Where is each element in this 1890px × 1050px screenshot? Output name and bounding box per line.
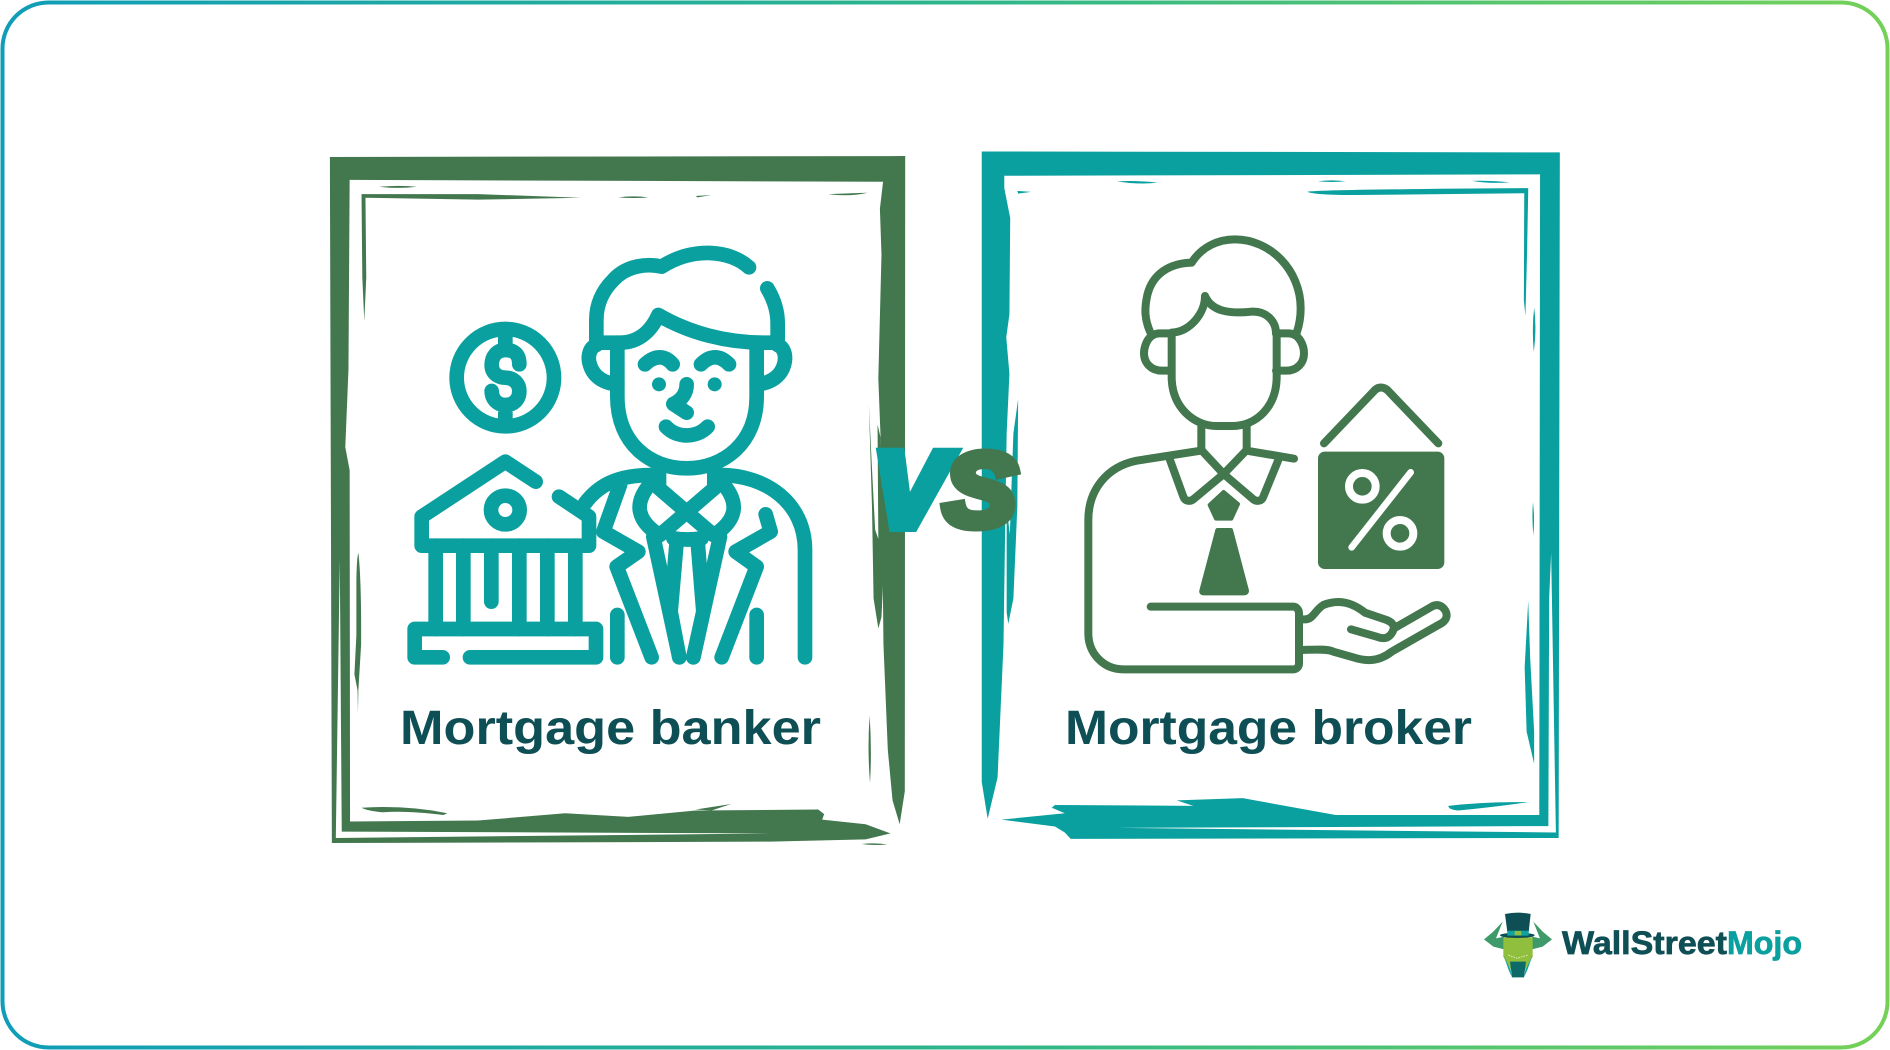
icon: broker body and arm: [1088, 426, 1299, 669]
icon: banker with bank and dollar coin: [415, 253, 805, 657]
logo: WallStreetMojo: [1484, 913, 1802, 977]
icon: bull with top hat: [1484, 913, 1552, 977]
panel: mortgage broker: [982, 151, 1560, 839]
icon: open hand: [1299, 602, 1447, 660]
vs badge: [874, 432, 1016, 549]
label: mortgage broker: Mortgage broker: [1065, 702, 1472, 755]
icon: banker person: [585, 253, 805, 657]
icon: bank building: [415, 462, 596, 657]
wordmark: Mojo: [1727, 925, 1802, 961]
icon: dollar coin: [457, 329, 554, 427]
label: mortgage banker: Mortgage banker: [400, 702, 821, 755]
icon: house with percent: [1318, 387, 1444, 569]
brush frame: teal: [982, 151, 1560, 839]
panel: mortgage banker: [330, 156, 905, 845]
vs badge: S: [944, 433, 1016, 548]
wordmark: WallStreet: [1562, 925, 1727, 961]
brush frame: green: [330, 156, 905, 845]
vs badge: V: [874, 432, 954, 549]
wordmark: [1562, 925, 1802, 961]
icon: broker head: [1144, 239, 1304, 426]
icon: necktie: [1201, 492, 1247, 593]
icon: broker with house and percent: [1088, 239, 1447, 669]
